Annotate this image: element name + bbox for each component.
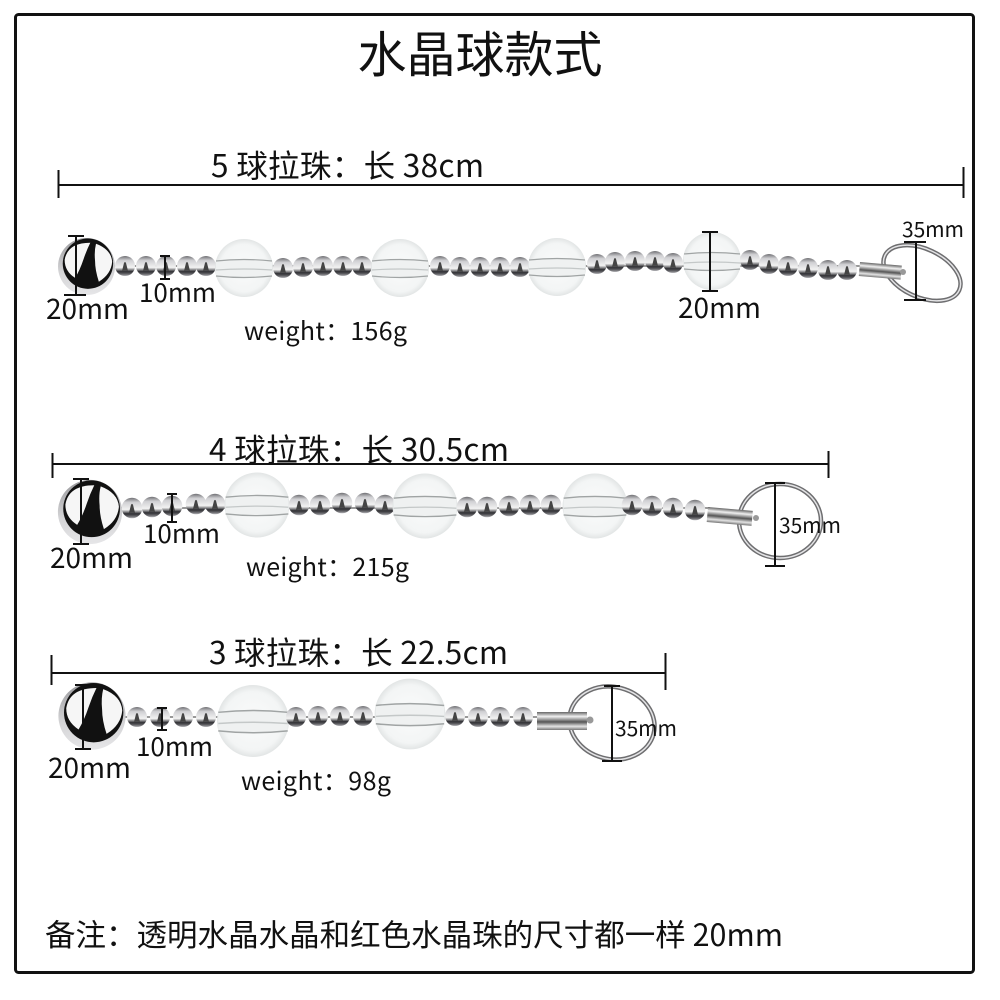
size label: bead 10mm: 10mm (139, 273, 216, 310)
size label: bead 10mm: 10mm (143, 514, 220, 551)
size label: ball 20mm: 20mm (50, 537, 133, 577)
size label: crystal 20mm: 20mm (678, 287, 761, 327)
size marks (64, 232, 926, 300)
string image: beads and crystals (58, 679, 540, 757)
size label: ball 20mm: 20mm (46, 288, 129, 328)
size marks (75, 685, 622, 761)
size label: bead 10mm: 10mm (136, 727, 213, 764)
string image: beads and crystals (58, 232, 860, 297)
panel: 5 ball string (46, 141, 969, 348)
pull ring (859, 234, 969, 312)
length dimension line (52, 451, 828, 478)
footnote: 备注：透明水晶水晶和红色水晶珠的尺寸都一样 20mm (45, 911, 783, 955)
heading: 3 ball: 3 球拉珠：长 22.5cm (209, 628, 508, 674)
size label: ball 20mm: 20mm (48, 747, 131, 787)
weight: weight：156g (244, 312, 407, 348)
length dimension line (58, 167, 964, 198)
size label: ring 35mm: 35mm (615, 713, 677, 743)
length dimension line (52, 653, 666, 690)
size marks (73, 479, 785, 566)
weight: weight：98g (241, 762, 391, 798)
pull ring (537, 677, 663, 769)
panel: 3 ball string (48, 628, 677, 798)
panel: 4 ball string (50, 425, 841, 584)
pull ring (707, 484, 821, 558)
string image: beads and crystals (58, 473, 710, 544)
weight: weight：215g (246, 548, 409, 584)
size label: ring 35mm: 35mm (902, 214, 964, 244)
size label: ring 35mm: 35mm (779, 510, 841, 540)
heading: 4 ball: 4 球拉珠：长 30.5cm (209, 425, 509, 471)
heading: 5 ball: 5 球拉珠：长 38cm (211, 141, 484, 187)
title: 水晶球款式 (357, 16, 603, 87)
